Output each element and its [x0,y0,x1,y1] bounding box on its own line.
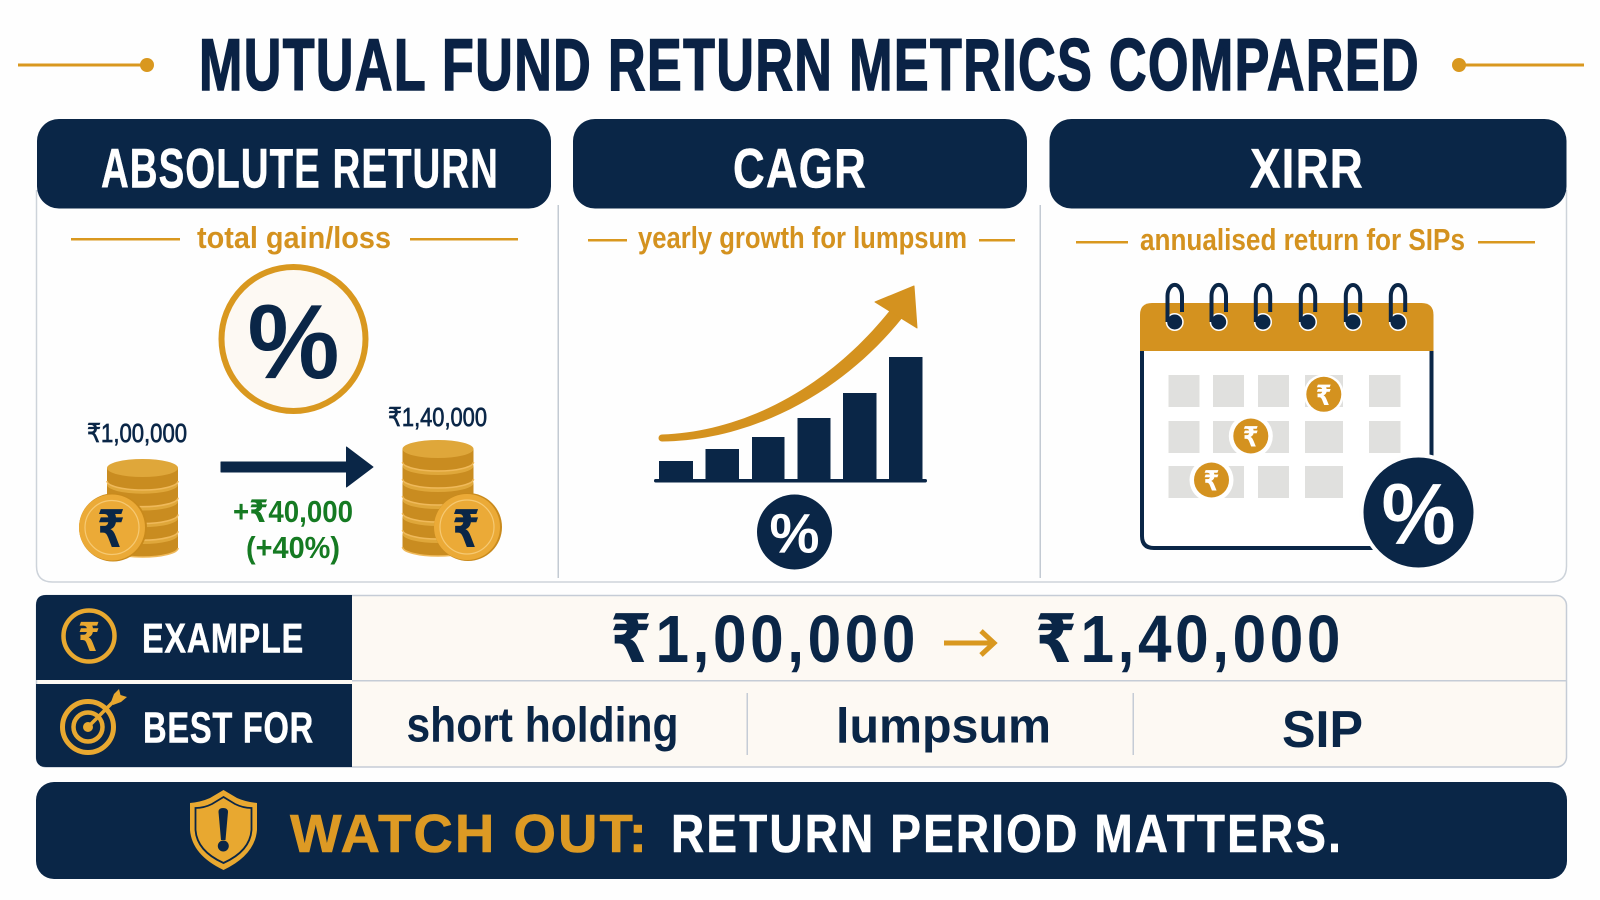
row label: example: EXAMPLE [142,614,304,662]
calendar binder rings [1166,285,1407,331]
header: absolute return [37,119,551,208]
icon: large coin stack [402,440,502,561]
label: ending amount: ₹1,40,000 [388,402,487,432]
label: starting amount: ₹1,00,000 [87,418,187,448]
rupee coins on calendar: ₹ [1316,380,1332,411]
rupee coins on calendar: ₹ [1243,422,1259,452]
arrow: growth curve [659,286,917,442]
cell: lumpsum: lumpsum [836,700,1051,754]
bar chart [654,357,927,482]
icon: percent badge: % [770,502,820,564]
subtitle: total gain/loss: total gain/loss [197,220,391,255]
arrow: growth [221,447,373,487]
header: xirr [1050,119,1566,208]
row label: best for [36,684,352,767]
column: absolute return [37,119,551,565]
icon: small coin stack: ₹ [97,501,125,559]
comparison table [36,595,1567,767]
icon: calendar [1140,285,1478,572]
row label: best for: BEST FOR [143,704,314,752]
warning banner [36,782,1567,879]
value: start amount: ₹1,00,000 [610,602,919,677]
warning message: RETURN PERIOD MATTERS. [671,804,1343,864]
icon: percent circle: % [248,283,340,401]
icon: rupee ring: ₹ [78,616,100,660]
percent badge on calendar [1360,454,1478,572]
subtitle: annualised return: annualised return for SIPs [1140,222,1465,257]
subtitle: yearly growth: yearly growth for lumpsum [638,220,967,255]
icon: percent badge [757,494,832,570]
icon: large coin stack: ₹ [452,501,480,559]
label: gain percent: (+40%) [246,530,340,565]
icon: warning shield [190,790,257,870]
rupee coins on calendar: ₹ [1204,466,1220,496]
cell: short holding: short holding [406,698,678,752]
row label: example [36,595,352,680]
row: best for [36,684,1363,767]
cell: sip: SIP [1282,701,1363,759]
header: cagr: CAGR [733,136,867,200]
icon: percent circle [222,267,366,411]
row: example [36,595,1344,680]
value: end amount: ₹1,40,000 [1035,602,1344,677]
rupee coins on calendar [1190,374,1344,502]
header: cagr [573,119,1027,208]
column: cagr [573,119,1027,570]
title ornament right [1452,58,1584,72]
label: gain: +₹40,000 [233,494,353,529]
title ornament left [18,58,154,72]
icon: target [62,689,127,752]
arrow: example [944,631,994,655]
calendar date squares [1168,375,1400,498]
icon: small coin stack [79,459,178,562]
percent badge on calendar: % [1382,467,1456,563]
icon: rupee ring [64,610,114,662]
warning label: WATCH OUT: [290,804,649,864]
header: xirr: XIRR [1250,136,1364,200]
header: absolute return: ABSOLUTE RETURN [101,136,499,200]
column: xirr [1050,119,1566,572]
